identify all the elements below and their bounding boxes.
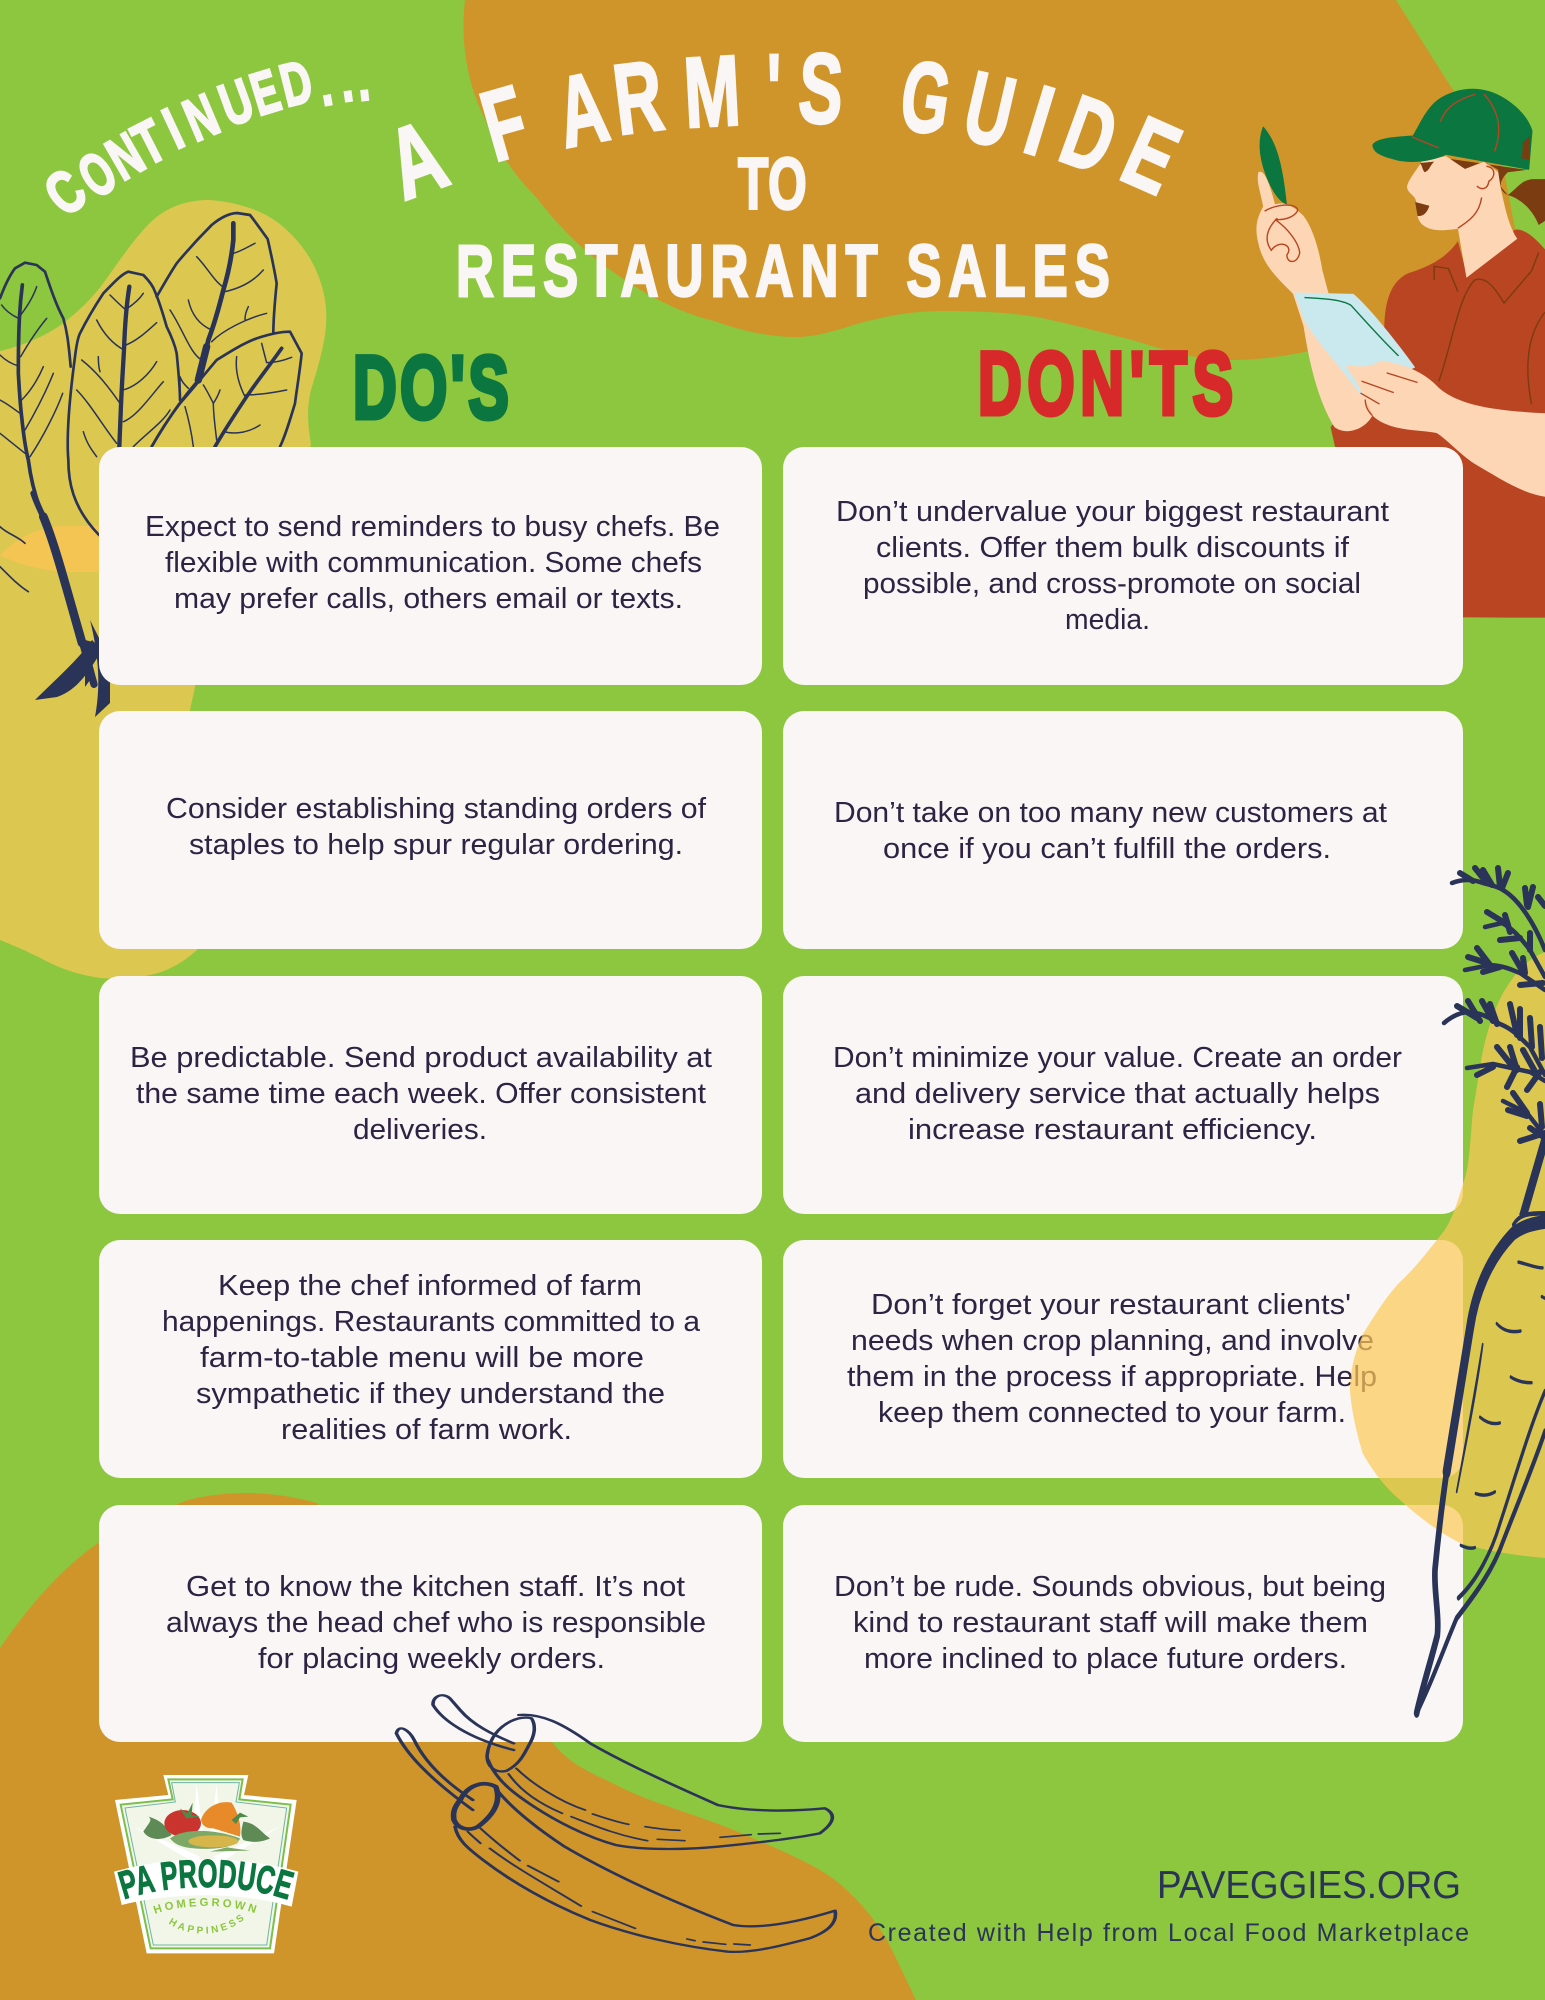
- title: A FARM'S GUIDE (arched): G: [894, 39, 957, 157]
- upper pepper ridges: [509, 1768, 780, 1841]
- curved label: CONTINUED...: .: [335, 46, 357, 115]
- woman farmer illustration: [1256, 89, 1545, 618]
- ear and neck lines: [1458, 166, 1494, 228]
- right translucent yellow blob: [1350, 952, 1545, 1558]
- card: don't 1: [783, 447, 1463, 685]
- card: do 5: always the head chef who is responsible: [166, 1607, 706, 1639]
- curved label: CONTINUED...: U: [211, 66, 262, 139]
- lower left edge of leaf 2: [68, 460, 99, 535]
- leaf 1 midrib and stem: [18, 285, 43, 517]
- card: do 4: [99, 1240, 762, 1478]
- curved label: CONTINUED...: I: [154, 96, 193, 161]
- logo keystone badge: [115, 1775, 297, 1953]
- spinach leaves illustration: [0, 213, 302, 684]
- curved label: CONTINUED...: T: [122, 107, 176, 178]
- curved label: CONTINUED...: O: [66, 138, 128, 211]
- carrot skin marks: [1461, 1262, 1545, 1548]
- logo side leaves: [143, 1817, 270, 1842]
- card: do 2: staples to help spur regular ordering.: [189, 829, 683, 861]
- credit line: Created with Help from Local Food Marketplace: [868, 1919, 1469, 1947]
- logo pepper: [201, 1802, 240, 1837]
- lower pepper cap: [454, 1784, 498, 1829]
- left light orange patch: [0, 526, 120, 572]
- card: don't 1: possible, and cross-promote on social: [863, 568, 1361, 600]
- card: don't 3: increase restaurant efficiency.: [908, 1114, 1317, 1146]
- card: don't 4: Don’t forget your restaurant clients': [871, 1289, 1351, 1321]
- carrot foliage: [1444, 868, 1545, 1141]
- carrot stem: [1523, 1140, 1545, 1216]
- title: A FARM'S GUIDE (arched): A: [373, 98, 460, 221]
- card: do 1: [99, 447, 762, 685]
- foliage leaflets: [1457, 868, 1545, 1141]
- card: don't 1: clients. Offer them bulk discounts if: [876, 532, 1350, 564]
- card: do 5: Get to know the kitchen staff. It’s not: [186, 1571, 685, 1603]
- card: don't 4: [783, 1240, 1463, 1478]
- PA Produce logo: [114, 1775, 298, 1954]
- card: do 4: Keep the chef informed of farm: [218, 1270, 642, 1302]
- title: A FARM'S GUIDE (arched): F: [470, 65, 539, 183]
- knuckle lines: [1361, 373, 1439, 448]
- logo banner: [114, 1859, 298, 1907]
- card: do 2: [99, 711, 762, 949]
- card: do 5: for placing weekly orders.: [258, 1643, 605, 1675]
- logo tomato: [164, 1810, 201, 1837]
- card: don't 2: Don’t take on too many new customers at: [834, 797, 1387, 829]
- lower pepper stem: [396, 1728, 473, 1810]
- curved label: CONTINUED...: .: [354, 46, 373, 113]
- raised arm and hand: [1256, 172, 1372, 431]
- title: A FARM'S GUIDE (arched): ': [767, 34, 781, 146]
- website URL: PAVEGGIES.ORG: [1157, 1864, 1461, 1907]
- card: don't 5: more inclined to place future orders.: [864, 1643, 1347, 1675]
- card: do 1: Expect to send reminders to busy chefs. Be: [145, 511, 720, 543]
- card: do 1: flexible with communication. Some chefs: [165, 547, 702, 579]
- leaf 4 midrib: [215, 348, 282, 447]
- logo inner border: [121, 1779, 291, 1948]
- card: do 5: [99, 1505, 762, 1742]
- card: do 4: farm-to-table menu will be more: [200, 1342, 644, 1374]
- card: do 3: Be predictable. Send product availability at: [130, 1042, 712, 1074]
- card: don't 5: Don’t be rude. Sounds obvious, but being: [834, 1571, 1386, 1603]
- leaf 2 midrib: [119, 287, 129, 447]
- logo tagline HAPPINESS: HAPPINESS: [168, 1914, 244, 1934]
- card: don't 4: needs when crop planning, and involve: [851, 1325, 1374, 1357]
- shirt lines: [1434, 253, 1545, 404]
- logo light rays: [133, 1784, 280, 1863]
- title: RESTAURANT SALES: RESTAURANT SALES: [456, 231, 1110, 312]
- upper pepper stem: [433, 1695, 514, 1750]
- top ochre blob: [464, 0, 1540, 360]
- card: don't 2: [783, 711, 1463, 949]
- card: do 3: [99, 976, 762, 1214]
- card: don't 2: once if you can’t fulfill the orders.: [883, 833, 1331, 865]
- leaf outlines: [0, 213, 302, 460]
- crossed leaf stems: [35, 620, 110, 717]
- title: A FARM'S GUIDE (arched): D: [1048, 74, 1131, 196]
- curved label: CONTINUED...: N: [174, 81, 228, 154]
- logo wordmark: PA PRODUCE: [117, 1859, 295, 1900]
- finger lines: [1265, 205, 1300, 261]
- hair ponytail: [1446, 158, 1545, 225]
- card: don't 4: keep them connected to your farm.: [878, 1397, 1346, 1429]
- logo tagline HOMEGROWN: HOMEGROWN: [153, 1898, 257, 1914]
- cap stitching: [1412, 94, 1499, 152]
- curved label: CONTINUED...: [32, 46, 373, 229]
- shirt: [1331, 230, 1545, 618]
- title: A FARM'S GUIDE (arched): A: [548, 50, 617, 170]
- card: do 1: may prefer calls, others email or texts.: [174, 583, 683, 615]
- card: don't 3: Don’t minimize your value. Create an order: [833, 1042, 1402, 1074]
- card: don't 5: kind to restaurant staff will make them: [853, 1607, 1368, 1639]
- section heading: DON'TS: DON'TS: [978, 334, 1233, 434]
- card: don't 5: [783, 1505, 1463, 1742]
- card: do 4: realities of farm work.: [281, 1414, 572, 1446]
- logo corn: [170, 1831, 240, 1849]
- leaf veins: [0, 243, 292, 457]
- card: do 2: Consider establishing standing orders of: [166, 793, 707, 825]
- face and neck: [1407, 156, 1517, 278]
- title: A FARM'S GUIDE (arched): I: [1013, 64, 1065, 177]
- section heading: DO'S: DO'S: [353, 338, 509, 438]
- mouth and eye: [1415, 162, 1434, 216]
- leaf held in hand: [1260, 126, 1287, 204]
- upper pepper body: [488, 1715, 832, 1849]
- card: do 4: sympathetic if they understand the: [196, 1378, 665, 1410]
- card: don't 3: [783, 976, 1463, 1214]
- curved label: CONTINUED...: N: [96, 120, 155, 193]
- title: A FARM'S GUIDE (arched): M: [681, 35, 743, 149]
- card: do 4: happenings. Restaurants committed to a: [162, 1306, 701, 1338]
- title: A FARM'S GUIDE (arched): [373, 32, 1195, 221]
- bottom ochre blob: [0, 1493, 916, 2000]
- title: A FARM'S GUIDE (arched): R: [608, 39, 669, 156]
- title: A FARM'S GUIDE (arched): S: [796, 32, 846, 146]
- carrot body: [1417, 1213, 1545, 1713]
- card: don't 1: media.: [1065, 604, 1150, 636]
- card: don't 4: them in the process if appropriate. Help: [847, 1361, 1377, 1393]
- tablet: [1294, 292, 1415, 395]
- chili peppers illustration: [396, 1695, 835, 1952]
- upper pepper cap: [487, 1718, 534, 1771]
- lower pepper body: [455, 1792, 835, 1952]
- leaf 3 midrib: [198, 223, 233, 380]
- curved label: CONTINUED...: C: [32, 156, 99, 229]
- title: A FARM'S GUIDE (arched): E: [1107, 95, 1195, 216]
- green cap: [1372, 89, 1532, 170]
- card: do 3: deliveries.: [353, 1114, 487, 1146]
- left yellow blob: [0, 200, 326, 979]
- card: don't 1: Don’t undervalue your biggest restaurant: [836, 496, 1389, 528]
- lower pepper ridges: [468, 1828, 750, 1945]
- card: do 3: the same time each week. Offer consistent: [136, 1078, 706, 1110]
- curved label: CONTINUED...: D: [273, 47, 319, 120]
- carrot outline: [1417, 1472, 1447, 1713]
- lower arm and hand: [1346, 360, 1545, 497]
- title: TO: TO: [738, 144, 807, 225]
- curved label: CONTINUED...: E: [243, 57, 287, 128]
- card: don't 3: and delivery service that actually helps: [855, 1078, 1380, 1110]
- curved label: CONTINUED...: .: [313, 50, 337, 119]
- title: A FARM'S GUIDE (arched): U: [955, 50, 1025, 170]
- foliage stalks: [1444, 880, 1545, 1136]
